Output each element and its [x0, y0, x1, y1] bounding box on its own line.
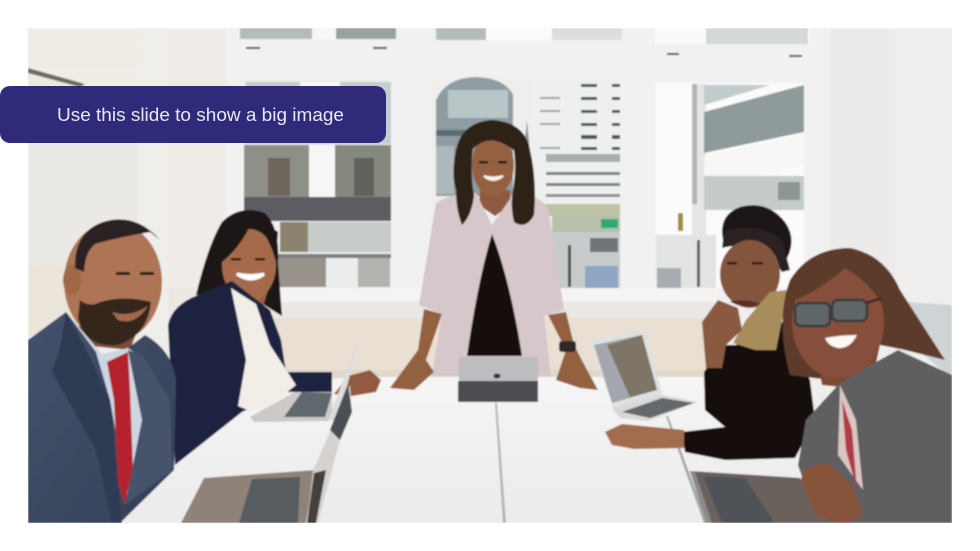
room walls — [28, 28, 952, 469]
person: man in blue suit — [28, 219, 176, 523]
window: centre pane — [432, 77, 620, 288]
banner: caption — [0, 86, 386, 143]
laptop: left back — [250, 352, 355, 422]
person: presenter — [390, 120, 598, 390]
laptop: right front — [690, 470, 862, 523]
laptop: left front — [181, 384, 352, 523]
person: woman in grey jacket — [782, 248, 952, 523]
person: woman in black with headband — [605, 205, 815, 460]
window: top panes — [240, 28, 810, 57]
window: left pane — [244, 80, 391, 288]
sofa — [905, 302, 952, 378]
table — [334, 376, 708, 523]
tablet — [458, 357, 538, 402]
window: right pane — [656, 83, 804, 288]
window sill and lower wall — [272, 302, 715, 378]
laptop: right back — [590, 330, 697, 421]
window frame — [226, 28, 830, 303]
person: woman in navy jacket — [168, 210, 381, 465]
caption text: Use this slide to show a big image — [57, 104, 344, 125]
